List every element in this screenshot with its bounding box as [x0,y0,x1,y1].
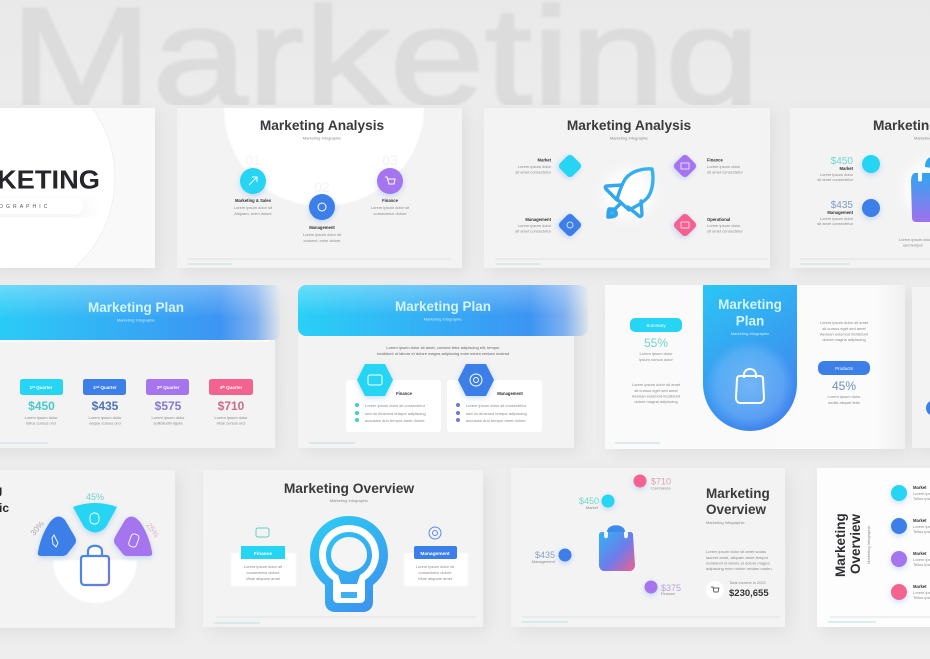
stat: 55 percent: Summary [646,323,666,328]
card: management: sed do eiusmod tempor adipiscing [466,411,527,416]
item: Market [913,518,927,523]
stat: 450: sit amet consectetur [817,177,854,182]
text block right: Lorem ipsum dolor sit amet [820,320,869,325]
card: management: accusam duo tempor amet dolore [466,418,526,423]
shield: Plan [736,314,764,328]
stat: 55 percent: 55% [644,336,668,350]
text block right: dolore magna adipiscing [822,337,866,342]
panel: marketing plan shield [605,285,905,449]
stat: 435 [817,199,880,226]
card: finance: Finance [396,391,413,396]
item: management: sit amet consectetur [515,228,552,234]
shield: Marketing Infographic [731,331,769,336]
quarter 4 [209,379,253,426]
stat: 450: Market [586,505,599,510]
item [891,584,930,600]
icon: bag [736,369,764,403]
segment: 25 percent: 25% [144,521,161,539]
card: finance [346,364,441,432]
segment: 25 percent [114,516,161,556]
card: management: Lorem ipsum dolor sit consectetur [466,403,527,408]
ghost numbers [245,152,398,195]
stat: 55 percent: Lorem ipsum dolor [639,351,673,356]
card: management [447,364,542,432]
item: finance: Finance [707,158,723,162]
item: operational [672,212,743,238]
text block: laoreet amet, aliquam amet tempor [706,555,769,560]
header band [0,285,280,340]
stat: 450: $450 [579,496,599,506]
quarter 1: 1ˢᵗ Quarter [30,385,53,390]
heading: Overview [706,502,767,517]
stat: 450: Market [840,166,854,171]
stat: 435 [532,548,572,564]
quarter 1: tellus cursus orci [26,420,56,426]
item: Market [913,584,927,589]
ghost numbers: 02 [314,179,330,195]
box: management: Lorem ipsum dolor sit [416,564,455,569]
text block left [632,382,681,404]
text block [706,549,772,571]
item: finance: consectetur dolore [374,211,407,216]
item: finance [672,153,743,179]
item: marketing and sales [234,168,273,216]
item: management [515,212,583,238]
item: marketing and sales: Marketing & Sales [235,198,272,203]
segment: 45 percent [73,492,117,532]
box: finance: Vitae aliquam amet [246,576,281,581]
total: $230,655 [729,588,769,599]
white arc [224,108,424,206]
item: finance: Lorem ipsum dolor [707,164,741,169]
stat: 45 percent: sedlis aliquet tetis [828,400,860,405]
item: finance: Lorem ipsum dolor sit [371,205,410,210]
item: management [303,194,342,243]
text block left: sit cursus eget sed amet [634,388,679,393]
item: management: consect, enim dolore [304,238,341,243]
heading: Marketing Analysis [260,118,385,133]
white semicircle [53,560,137,603]
segment: 45 percent: 45% [86,492,104,502]
panel: cover slide [0,108,158,272]
panel: marketing overview bag [511,468,785,627]
item: operational: sit amet consectetur [707,228,743,234]
segment: 30 percent [29,516,76,556]
stat: 45 percent: Lorem ipsum dolor [827,394,861,399]
quarter 3: $575 [155,399,182,413]
box: management: Management [420,551,450,557]
item: marketing and sales: Lorem ipsum dolor sit [234,205,273,210]
heading: Marketing Infographic [706,520,744,525]
cover circle [74,108,116,268]
item: market: Market [538,158,552,162]
box: finance: consectetur dolore [247,570,280,575]
icon: bag [599,525,635,571]
quarter 4: 4ᵗʰ Quarter [220,385,243,390]
icon: bag [81,546,109,585]
panel: marketing overview bulb: Marketing Infographic [330,498,368,503]
panel: marketing overview partial: sed tempor [903,242,924,248]
panel: marketing analysis rocket: Marketing Infographic [610,136,648,140]
icon: bag [905,157,930,222]
item: finance [371,168,410,216]
box: finance: Lorem ipsum dolor sit [244,564,283,569]
card: finance: accusam duo tempor amet dolore [365,418,425,423]
quarter 1: $450 [28,399,55,413]
stat: 55 percent: ipsum cursus dolor [639,357,673,362]
panel: marketing overview partial [790,108,930,268]
panel: marketing plan quarters: Marketing Infographic [117,318,155,322]
item: management: Management [309,225,335,230]
heading: Marketing [706,486,770,501]
item [891,485,930,501]
stat: 375: Finance [661,591,676,596]
panel: marketing plan hexagons [298,285,588,448]
stat: 45 percent [818,361,870,405]
panel: marketing analysis rocket [484,108,770,268]
panel: marketing overview bulb [203,470,483,627]
panel: marketing plan quarters: Marketing Plan [88,300,184,315]
stat: 450: Lorem ipsum dolor [820,172,854,177]
total [706,580,769,599]
stat: 45 percent: 45% [832,379,856,393]
panel: partial slide right [912,287,930,448]
panel: marketing plan hexagons: Marketing Infographic [424,316,462,322]
item: marketing and sales: Aliquam, enim dolore [234,211,273,216]
text block right: Aenean euismod incididunt [820,332,869,336]
item [891,551,930,567]
intro text: Lorem ipsum dolor sit amet, consect tetur adipiscing elit, tempor [386,345,500,350]
stat: 450: $450 [831,156,853,167]
quarter 2: $435 [92,399,119,413]
quarter 3: 3ʳᵈ Quarter [157,385,180,390]
text block left: Lorem ipsum dolor sit amet [632,382,681,387]
quarter 4: vitae cursus orci [217,420,246,426]
item: market: Lorem ipsum dolor [518,164,552,169]
item: management: Lorem ipsum dolor [518,223,552,228]
stat: 450 [817,155,880,182]
text block right: sit cursus eget sed amet [822,326,867,331]
card: management: Management [497,391,523,396]
panel: marketing plan hexagons: Marketing Plan [395,299,491,314]
item: management: Management [525,217,552,222]
header band [298,285,588,336]
quarter 2: eaque cursus orci [89,420,121,426]
shield: Marketing [718,297,782,312]
panel: marketing analysis circles: Marketing Infographic [303,136,341,140]
item [891,518,930,534]
stat: 435: $435 [535,550,555,560]
item: market: sit amet consectetur [515,170,552,174]
card: finance: Lorem ipsum dolor sit consectetur [365,403,426,408]
item: Market [913,485,927,490]
vertical heading: Marketing [833,513,848,577]
panel: marketing plan hexagons: incididunt ut labore et dolore magna adipiscing enim minim veniam nostrud [377,351,509,356]
card: finance: sed do eiusmod tempor adipiscing [365,411,426,416]
panel: arc chart slide [0,470,175,628]
stat: 435: sit amet consectetur [817,221,854,226]
box: management: Vitae aliquam amet [418,576,453,581]
stat: 375: $375 [661,583,681,593]
quarter 1 [20,379,63,426]
quarter 2: Lorem ipsum dolor [88,415,122,420]
stat: 710 [634,474,671,490]
ghost numbers: 03 [382,152,398,168]
item: Market [913,551,927,556]
stat: 435: Management [827,210,854,215]
text block left: dolore magna adipiscing [634,399,678,404]
vertical heading [833,513,871,577]
item: operational: Lorem ipsum dolor [707,223,741,228]
panel: marketing overview list [817,468,930,627]
item: market [515,153,583,179]
item: operational: Operational [707,217,730,222]
stat: 375 [644,580,681,596]
total: Total Income in 2021 [729,580,767,585]
stat: 55 percent [630,318,682,362]
item: management: Lorem ipsum dolor sit [303,232,342,237]
quarter 3: Lorem ipsum dolor [151,415,185,420]
cover subtitle pill: OGRAPHIC [0,204,50,210]
text block: adipiscing enim minim veniam nostru [706,566,772,571]
stat: 435: Lorem ipsum dolor [820,216,854,221]
ghost numbers: 01 [245,152,261,168]
shield [703,285,797,431]
panel: marketing plan quarters [0,285,280,448]
quarter 2: 2ⁿᵈ Quarter [93,385,117,390]
box: finance: Finance [254,551,272,557]
icon: light bulb [310,516,388,612]
heading: Marketing Overview [284,481,414,496]
rocket [604,169,653,218]
quarter 1: Lorem ipsum dolor [24,415,58,420]
quarter 4: Lorem ipsum dolor [214,415,248,420]
quarter 3 [146,379,189,426]
item: finance: sit amet consectetur [707,170,743,174]
quarter 2 [83,379,126,426]
stat: 435: Management [532,559,556,564]
box: finance [231,528,296,586]
text block right [820,320,869,342]
heading [706,486,770,525]
slide title [0,483,9,515]
vertical heading: Overview [848,513,863,574]
stat: 45 percent: Products [835,366,854,371]
text block left: Aenean euismod incididunt [632,394,681,398]
quarter 4: $710 [218,399,245,413]
quarter 3: sollicitudin ligula [154,420,183,426]
box: management: consectetur dolore [419,570,452,575]
cover subtitle pill [0,198,83,214]
stat: 710: Commerce [651,486,671,490]
stat: 710: $710 [651,476,671,486]
stat: 435: $435 [831,200,853,211]
stat: 450 [579,494,614,510]
vertical heading: Marketing Infographic [866,526,871,564]
item: finance: Finance [382,198,399,203]
heading: Marketing Analysis [567,118,692,133]
panel: marketing analysis circles [177,108,462,268]
text block: incididunt ut labore et dolore magna [706,560,770,566]
segment: 30 percent: 30% [29,519,46,537]
box: management [404,527,468,586]
text block: Lorem ipsum dolor sit amet sodas [706,549,766,554]
